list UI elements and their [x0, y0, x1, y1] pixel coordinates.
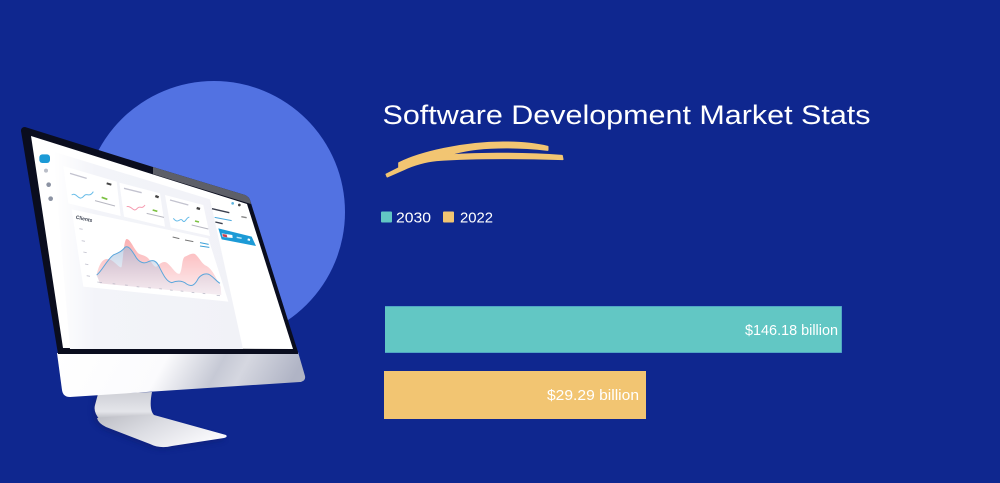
- payment card button: [218, 228, 256, 246]
- stat card three: [165, 195, 210, 236]
- monitor stand: [93, 392, 227, 450]
- right panel: [212, 202, 256, 246]
- chart axis ticks: [79, 229, 220, 296]
- dashboard background: [53, 152, 243, 349]
- sidebar icons: [44, 169, 53, 201]
- stat card one: [63, 166, 121, 216]
- monitor screen: [31, 136, 293, 349]
- monitor chin: [57, 352, 305, 397]
- bar: 2022 value: $29.29 billion: [547, 387, 639, 404]
- title: Software Development Market Stats: [382, 100, 870, 130]
- blue line series: [97, 247, 220, 286]
- red area series: [97, 239, 221, 295]
- decorative underline brush stroke: [386, 142, 563, 177]
- bar: 2030 value: [385, 306, 842, 353]
- blue area series: [97, 247, 221, 295]
- chart heading: Clients: [75, 215, 93, 224]
- legend item: 2022: 2022: [460, 210, 493, 226]
- chart period tabs: [173, 237, 209, 247]
- decorative circle behind monitor: [83, 81, 345, 343]
- legend: [381, 210, 493, 226]
- legend item: 2030: 2030: [396, 210, 431, 226]
- dashboard user interface: [39, 152, 256, 349]
- bar: 2030 value: $146.18 billion: [745, 322, 838, 339]
- sidebar logo: [39, 154, 50, 163]
- main area chart card: [72, 209, 228, 302]
- illustration: desktop monitor: [21, 127, 305, 450]
- bar: 2022 value: [384, 371, 646, 419]
- monitor bezel: [21, 127, 298, 354]
- stat card two: [119, 183, 165, 227]
